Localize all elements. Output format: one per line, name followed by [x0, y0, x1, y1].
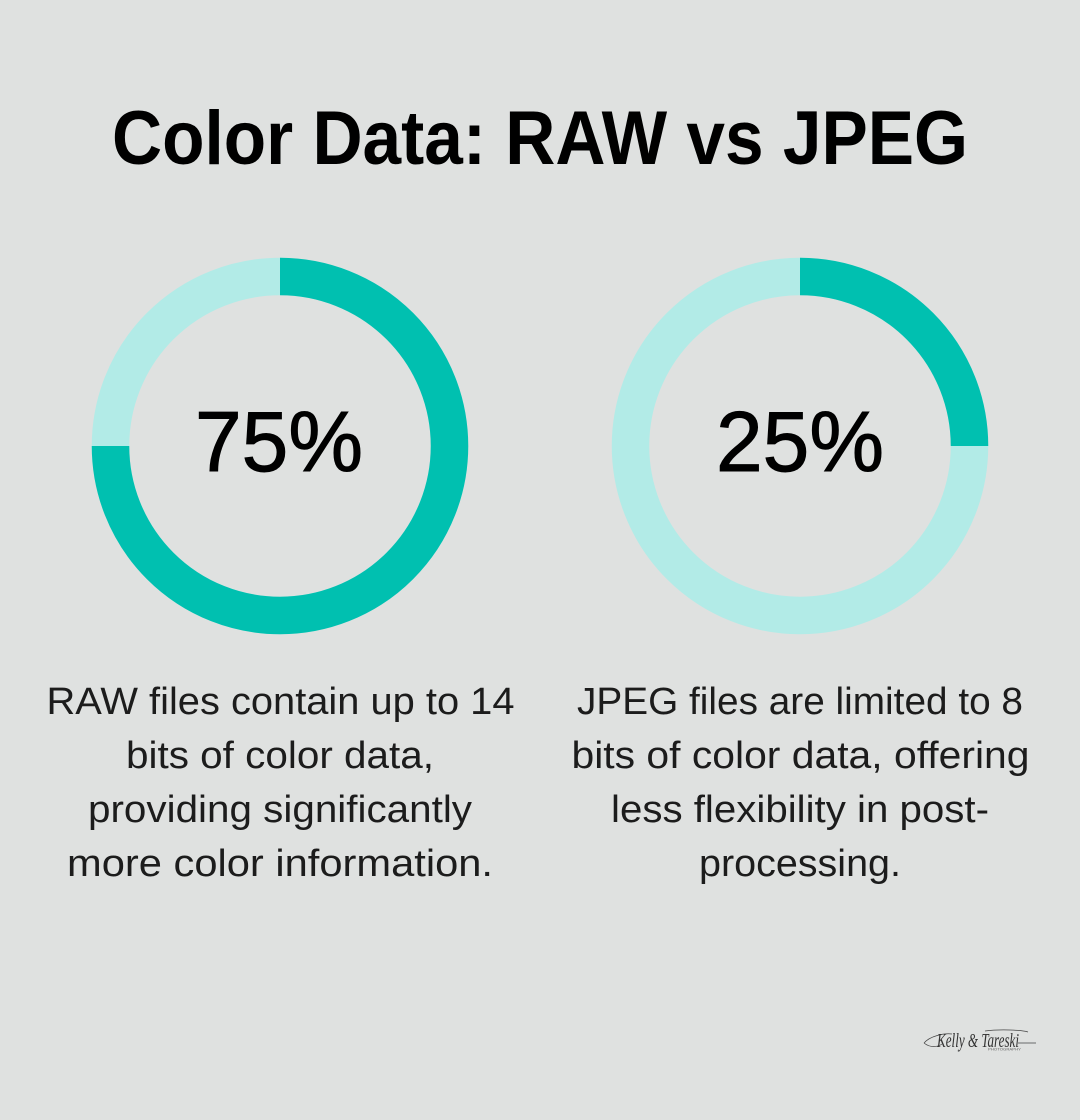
description: JPEG: bits of color data, offering — [572, 735, 1030, 777]
description: RAW: providing significantly — [88, 789, 472, 831]
value: 25%: 25% — [716, 395, 884, 490]
value: 75%: 75% — [195, 395, 363, 490]
description: JPEG: less flexibility in post- — [611, 789, 989, 831]
title: Color Data: RAW vs JPEG — [112, 96, 968, 181]
description: RAW: RAW files contain up to 14 — [46, 681, 514, 723]
panel: JPEG — [572, 276, 1030, 885]
description: RAW: more color information. — [67, 843, 493, 885]
description: RAW: bits of color data, — [126, 735, 434, 777]
donut chart: 25% — [630, 276, 970, 616]
logo: Kelly & Tareski Photography: PHOTOGRAPHY — [988, 1048, 1022, 1052]
description: JPEG: processing. — [699, 843, 901, 885]
description: RAW — [46, 681, 514, 885]
description: JPEG: JPEG files are limited to 8 — [577, 681, 1023, 723]
panel: RAW — [46, 276, 514, 885]
donut chart: 75% — [110, 276, 450, 616]
logo: Kelly & Tareski Photography: Kelly & Tareski — [936, 1030, 1019, 1052]
description: JPEG — [572, 681, 1030, 885]
